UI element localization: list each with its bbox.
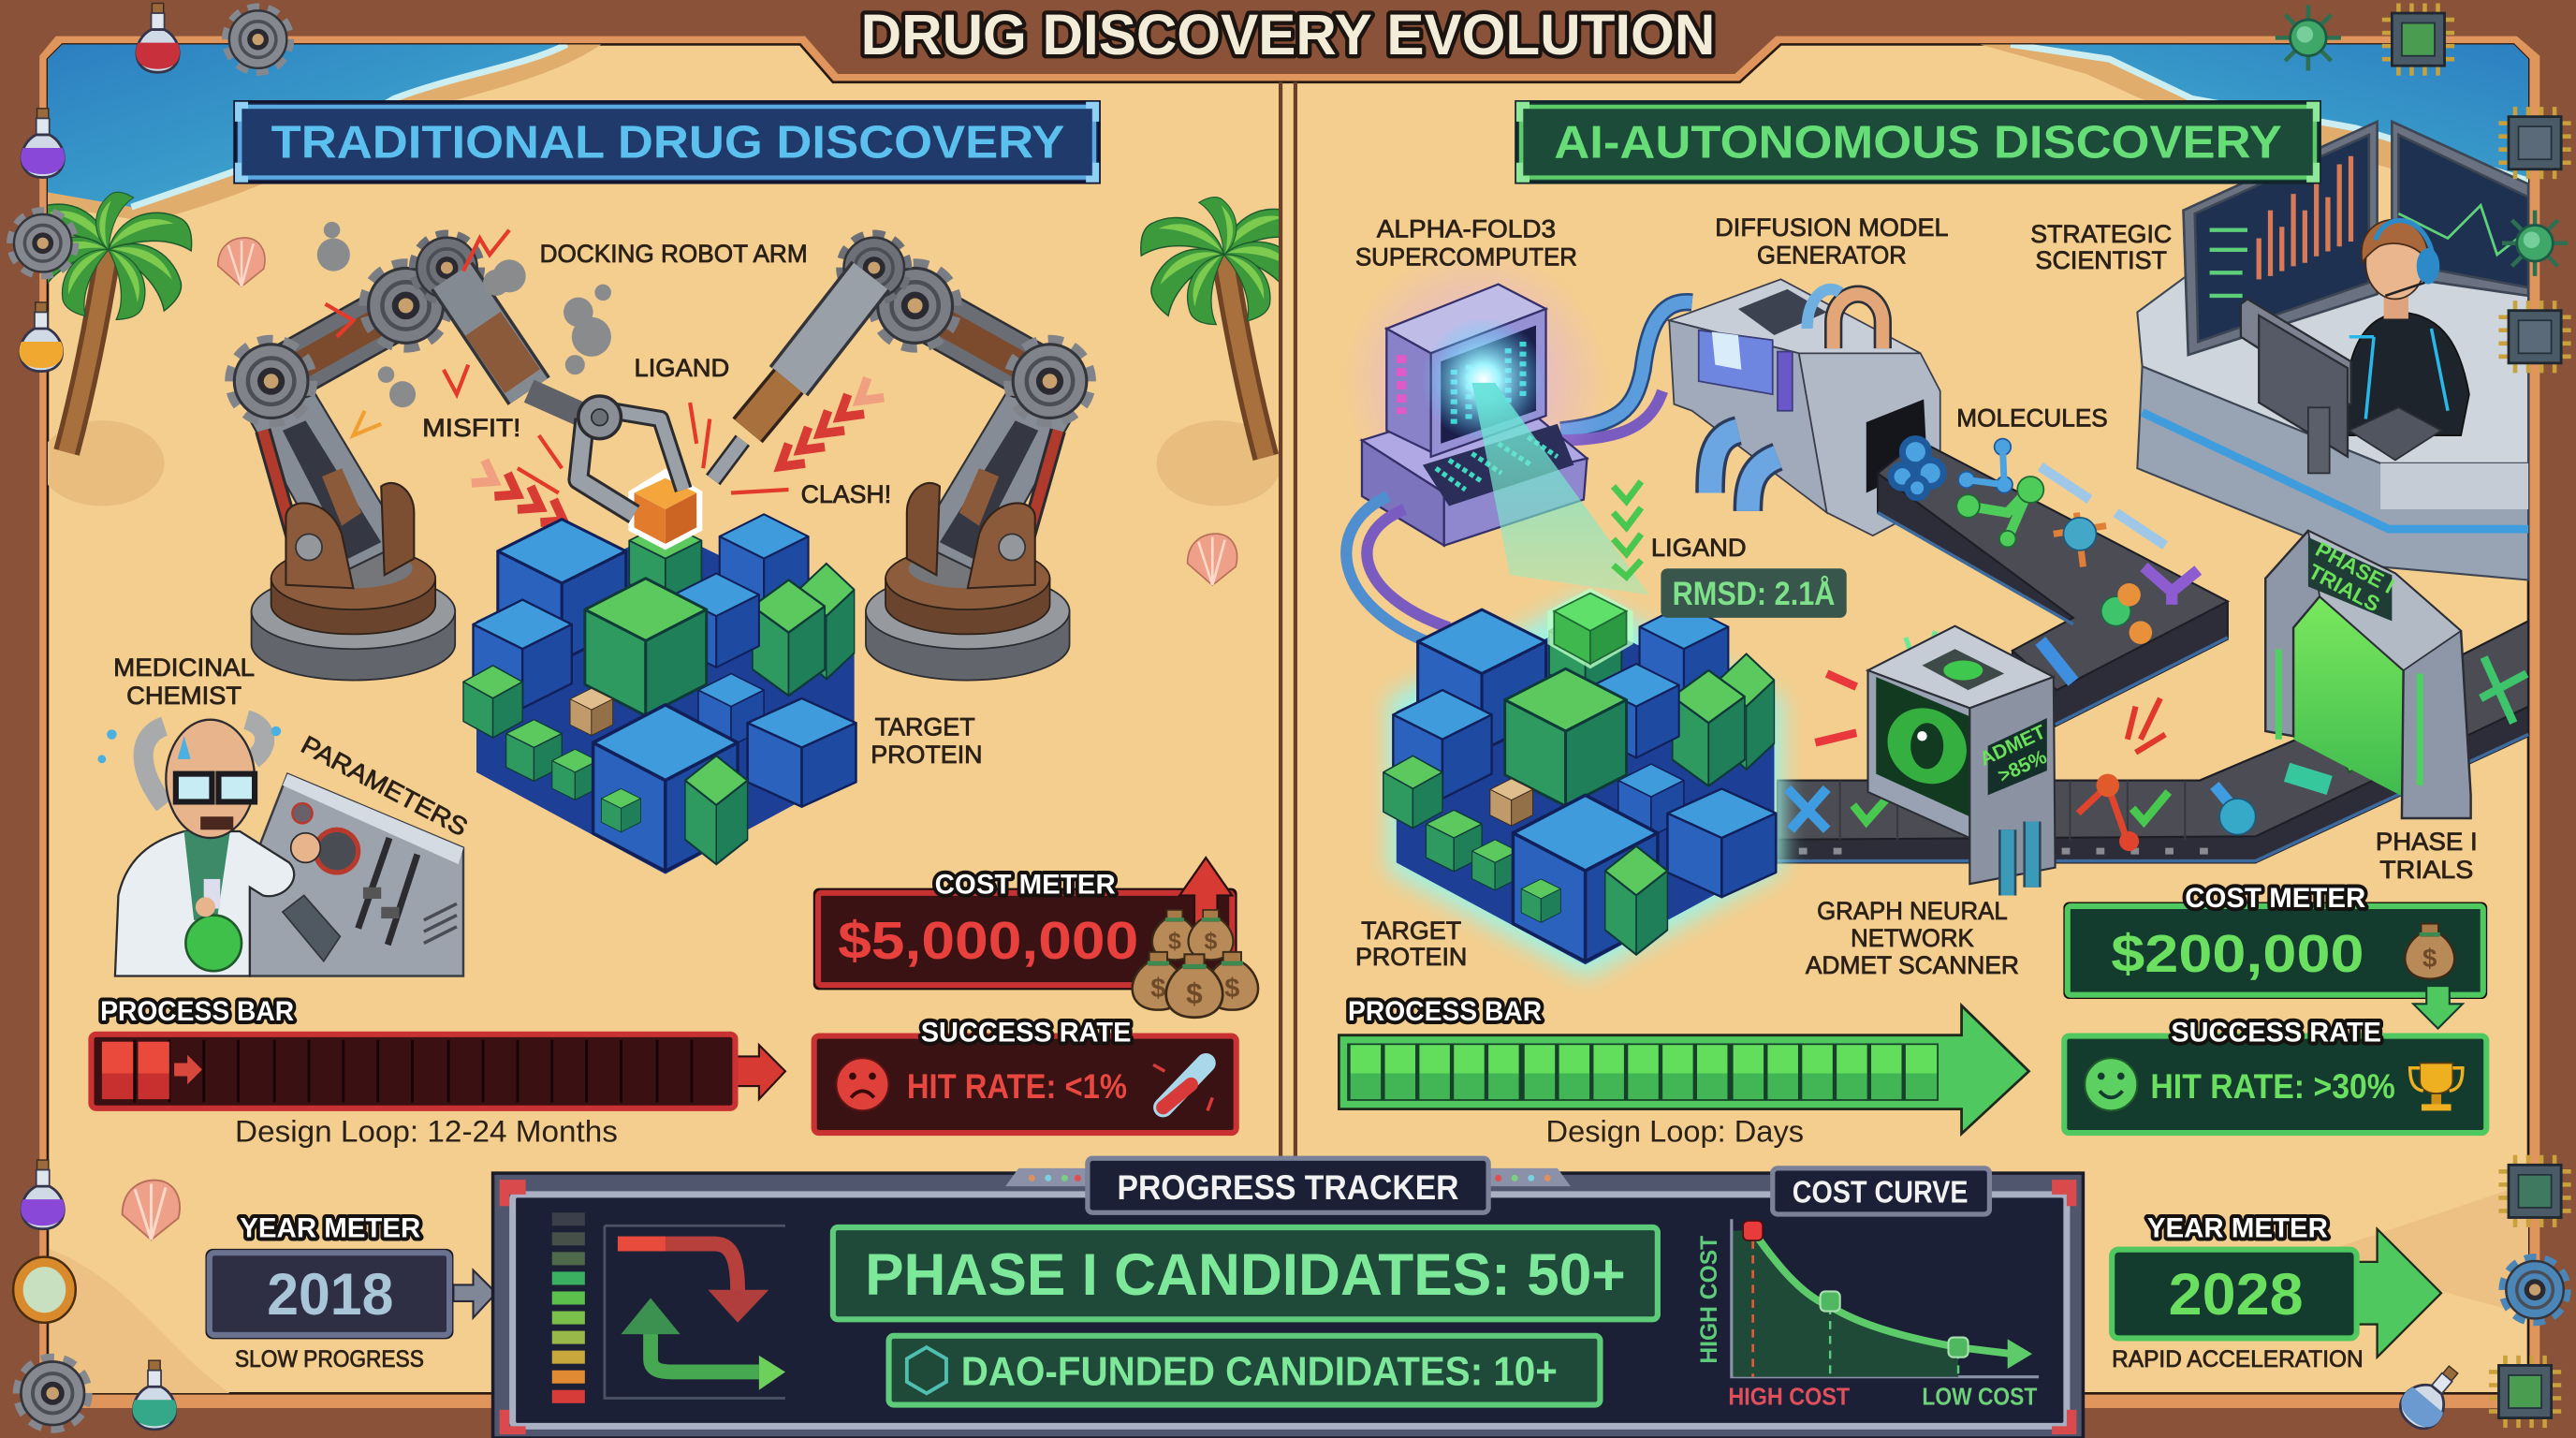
medicinal chemist label: MEDICINAL	[113, 653, 255, 682]
parameters label: PARAMETERS	[297, 729, 473, 842]
phase I label: PHASE I	[2376, 827, 2478, 856]
target protein	[463, 514, 856, 874]
banner: traditional drug discovery	[235, 102, 1099, 183]
icon: blue gear	[2504, 1258, 2566, 1321]
icon: chip bottom	[2489, 1356, 2561, 1428]
icon: purple flask bottom	[21, 1160, 65, 1229]
ADMET scanner	[1815, 626, 2165, 895]
money bag	[2405, 924, 2454, 979]
pale motion arrows	[2041, 466, 2165, 546]
design loop caption: Design Loop: 12-24 Months	[235, 1115, 618, 1149]
diffusion label: DIFFUSION MODEL	[1715, 213, 1949, 242]
year value: 2028	[2169, 1262, 2304, 1328]
cyan burst	[1421, 317, 1546, 442]
up arrow	[1179, 858, 1232, 933]
cost meter heading: COST METER	[2185, 883, 2365, 914]
cost meter AI	[2064, 883, 2486, 1029]
robot arm right	[713, 235, 1090, 681]
x axis low cost: LOW COST	[1922, 1383, 2037, 1411]
year value: 2018	[267, 1262, 393, 1328]
target protein AI label	[1355, 916, 1467, 971]
wet sand left	[48, 44, 601, 222]
sad face	[836, 1058, 889, 1110]
console base	[1362, 394, 1587, 493]
year meter 2028	[2112, 1213, 2441, 1372]
target protein label: TARGET	[875, 712, 975, 741]
icon: virus top	[2276, 5, 2341, 70]
medicinal chemist label	[113, 653, 255, 710]
phase I label	[2376, 827, 2478, 884]
LED gauge	[552, 1212, 585, 1403]
diffusion model generator	[1558, 279, 1940, 536]
slow progress: SLOW PROGRESS	[235, 1347, 424, 1372]
cables	[1346, 496, 1438, 646]
phase I candidates box: PHASE I CANDIDATES: 50+	[865, 1242, 1626, 1308]
palm tree right	[1140, 197, 1279, 461]
arrow	[453, 1270, 496, 1318]
process bar traditional	[91, 996, 785, 1149]
icon: chip right 3	[2498, 1155, 2571, 1227]
medicinal chemist label: CHEMIST	[126, 681, 242, 710]
long green arrow	[1339, 1005, 2029, 1134]
molecules on upper belt	[1891, 439, 2198, 682]
banner: AI autonomous discovery	[1516, 102, 2320, 183]
target protein label	[871, 712, 983, 769]
sand patches	[50, 1249, 230, 1393]
desk monitor and keyboard	[2241, 299, 2441, 473]
test tube	[1153, 1064, 1212, 1110]
gate sign text: PHASE I	[2312, 536, 2398, 598]
banner: traditional drug discovery: TRADITIONAL DRUG DISCOVERY	[271, 117, 1064, 168]
happy face	[2085, 1058, 2137, 1110]
cost value: $5,000,000	[838, 911, 1138, 970]
molecules label: MOLECULES	[1956, 403, 2108, 432]
rapid acceleration: RAPID ACCELERATION	[2112, 1347, 2364, 1372]
admet screen text: >85%	[1995, 746, 2050, 787]
right panel: AI discovery	[1339, 122, 2528, 1149]
icon: chip right 2	[2498, 301, 2571, 373]
icon: chip right 1	[2498, 107, 2571, 179]
hit rate: HIT RATE: <1%	[907, 1067, 1127, 1106]
green checks	[1613, 481, 1641, 577]
main title: DRUG DISCOVERY EVOLUTION	[861, 3, 1715, 67]
admet label: ADMET SCANNER	[1806, 950, 2019, 979]
admet label: GRAPH NEURAL	[1817, 896, 2008, 925]
strategic scientist label: STRATEGIC	[2030, 219, 2172, 248]
green cargo arrow	[2333, 708, 2398, 772]
RMSD badge	[1661, 568, 1847, 618]
target protein AI	[1383, 605, 1776, 964]
icon: purple flask	[21, 109, 65, 178]
spark flashes	[326, 230, 788, 493]
phase I label: TRIALS	[2379, 855, 2473, 884]
icon: red flask	[136, 4, 180, 72]
robot arm left	[231, 235, 592, 681]
strategic scientist figure	[2346, 220, 2469, 435]
palm shadows	[39, 420, 165, 506]
red arrows converging right	[781, 378, 884, 466]
banner: AI autonomous discovery: AI-AUTONOMOUS DISCOVERY	[1554, 117, 2282, 168]
money bags	[1133, 910, 1258, 1018]
icon: chip top	[2382, 4, 2454, 76]
cable bundle	[1560, 302, 1692, 431]
clash label: CLASH!	[801, 479, 891, 508]
ligand label: LIGAND	[1651, 533, 1747, 562]
trophy	[2410, 1064, 2463, 1110]
medicinal chemist figure	[97, 720, 320, 976]
palm tree left	[48, 191, 193, 456]
progress tracker tab	[1088, 1158, 1488, 1212]
phase I gate	[2265, 531, 2471, 818]
icon: gear left	[11, 212, 74, 274]
red arrows converging left	[472, 460, 564, 522]
protein glow	[1388, 594, 1782, 977]
success rate AI	[2064, 1018, 2486, 1133]
strategic scientist label: SCIENTIST	[2036, 245, 2167, 274]
cost curve chart	[1697, 1219, 2039, 1411]
progress arrow tail	[735, 1045, 785, 1099]
monitors	[2183, 122, 2528, 355]
platform	[2137, 271, 2528, 580]
scanning beam	[1472, 383, 1649, 594]
conveyor belts	[1778, 440, 2528, 862]
ligand label: LIGAND	[634, 353, 729, 382]
gate sign text	[2301, 536, 2398, 619]
cost meter traditional	[814, 858, 1258, 1018]
wet sand right	[1981, 45, 2528, 183]
cost meter heading: COST METER	[935, 870, 1116, 901]
icon: gear top	[227, 8, 289, 70]
process bar AI	[1339, 996, 2029, 1149]
RMSD badge: RMSD: 2.1Å	[1673, 575, 1835, 612]
icon: blue flask	[2393, 1356, 2470, 1437]
year meter heading: YEAR METER	[240, 1213, 420, 1244]
DAO funded box	[889, 1336, 1600, 1405]
foam left	[131, 44, 567, 207]
molecules on lower belt	[1788, 657, 2526, 851]
DAO funded box: DAO-FUNDED CANDIDATES: 10+	[961, 1348, 1558, 1394]
year meter 2018	[206, 1213, 496, 1372]
alpha fold label: ALPHA-FOLD3	[1377, 214, 1556, 243]
phase I candidates box	[833, 1227, 1658, 1319]
icon: amulet	[13, 1257, 76, 1323]
docking robot arm label: DOCKING ROBOT ARM	[540, 239, 808, 268]
monitor	[1386, 285, 1546, 353]
admet label	[1806, 896, 2019, 979]
indicator strips	[1005, 1168, 1571, 1186]
left panel: traditional discovery	[91, 222, 1258, 1149]
progress tracker panel	[493, 1158, 2083, 1438]
progress tracker tab: PROGRESS TRACKER	[1117, 1168, 1459, 1207]
green ligand	[1547, 588, 1633, 668]
icon: virus right	[2502, 211, 2568, 276]
icon: orange flask	[19, 302, 63, 372]
icon: gear bottom	[19, 1359, 87, 1428]
seashell	[1188, 534, 1237, 585]
loop chart	[605, 1225, 785, 1399]
panel divider	[1281, 82, 1295, 1175]
success rate heading: SUCCESS RATE	[2171, 1018, 2381, 1049]
gate sign text: TRIALS	[2305, 559, 2384, 617]
smoke puffs	[317, 222, 611, 407]
diffusion label: GENERATOR	[1757, 241, 1907, 270]
target protein AI label: PROTEIN	[1355, 942, 1467, 971]
admet label: NETWORK	[1851, 923, 1974, 952]
success rate heading: SUCCESS RATE	[921, 1018, 1131, 1049]
admet screen text: ADMET	[1976, 721, 2049, 770]
success rate traditional	[814, 1018, 1237, 1133]
down arrow	[2413, 986, 2463, 1029]
water left	[48, 44, 567, 207]
misfit label: MISFIT!	[422, 413, 520, 442]
admet screen text	[1976, 721, 2059, 791]
target protein AI label: TARGET	[1361, 916, 1461, 945]
water right	[2011, 44, 2528, 181]
process bar heading: PROCESS BAR	[100, 996, 294, 1027]
purple halo	[1340, 246, 1610, 516]
control panel	[250, 774, 463, 976]
alpha fold label	[1355, 214, 1577, 271]
x axis high cost: HIGH COST	[1728, 1383, 1850, 1411]
target protein label: PROTEIN	[871, 740, 983, 769]
seashell	[218, 238, 265, 286]
robot claw	[578, 396, 683, 514]
orange ligand cube	[631, 472, 700, 547]
corner accents	[500, 1180, 2076, 1434]
seashell	[123, 1181, 180, 1240]
alpha fold label: SUPERCOMPUTER	[1355, 242, 1577, 271]
year meter heading: YEAR METER	[2147, 1213, 2328, 1244]
y axis label: HIGH COST	[1697, 1236, 1722, 1364]
design loop caption: Design Loop: Days	[1546, 1115, 1804, 1149]
cost curve tab	[1773, 1168, 1989, 1214]
scientist station	[2137, 122, 2528, 580]
hit rate: HIT RATE: >30%	[2150, 1067, 2395, 1106]
cost curve tab: COST CURVE	[1793, 1176, 1969, 1211]
process bar heading: PROCESS BAR	[1348, 996, 1542, 1027]
strategic scientist label	[2030, 219, 2172, 274]
supercomputer	[1340, 246, 1610, 646]
cost value: $200,000	[2111, 924, 2364, 983]
hex icon	[907, 1347, 946, 1393]
diffusion label	[1715, 213, 1949, 270]
foam right	[2011, 44, 2528, 181]
icon: green flask	[133, 1360, 177, 1430]
arrow	[2356, 1229, 2441, 1357]
